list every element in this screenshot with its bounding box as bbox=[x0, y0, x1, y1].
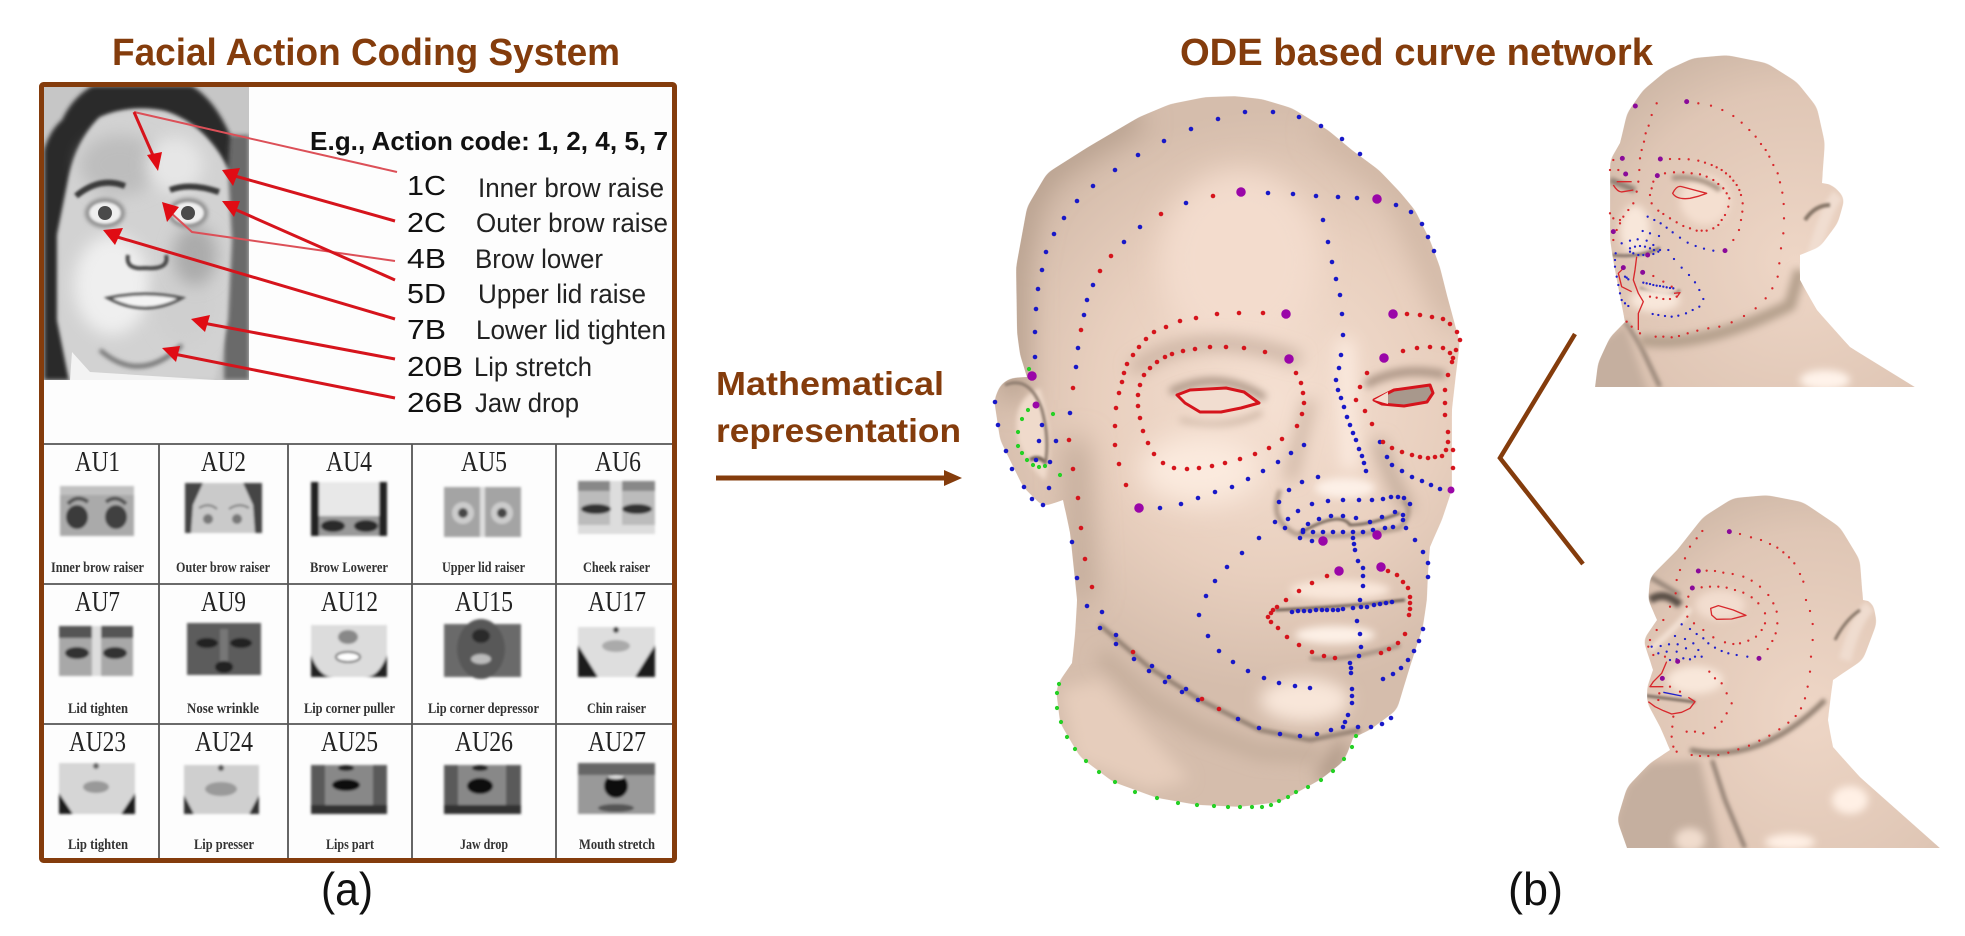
head surface bbox=[994, 96, 1460, 807]
title: Facial Action Coding System: Facial Action Coding System bbox=[112, 32, 620, 74]
red curves bbox=[1069, 196, 1460, 709]
thumbnail: AU1 bbox=[60, 486, 134, 536]
AU labels: AU23 bbox=[69, 726, 126, 758]
AU captions: Nose wrinkle bbox=[187, 701, 259, 717]
action code list: Brow lower bbox=[475, 244, 603, 274]
arrow: to curve network bbox=[716, 470, 962, 486]
connector: bracket to side views bbox=[1500, 334, 1583, 564]
AU captions: Lips part bbox=[326, 837, 374, 853]
AU captions: Inner brow raiser bbox=[51, 560, 144, 576]
AU labels: AU4 bbox=[326, 446, 372, 478]
AU captions: Outer brow raiser bbox=[176, 560, 270, 576]
thumbnail: AU24 bbox=[184, 765, 259, 814]
eye: right bbox=[1374, 385, 1433, 406]
red arrows from action codes to face bbox=[103, 112, 397, 398]
AU labels: AU1 bbox=[75, 446, 120, 478]
thumbnail: AU25 bbox=[311, 765, 387, 814]
AU labels bbox=[69, 446, 646, 758]
network dots: top side view bbox=[1610, 102, 1784, 337]
AU captions: Upper lid raiser bbox=[442, 560, 525, 576]
thumbnail: AU12 bbox=[311, 625, 387, 677]
label: Mathematical representation bbox=[716, 365, 961, 449]
label: Mathematical representation: Mathematical bbox=[716, 365, 944, 402]
action code list: 7B bbox=[407, 314, 446, 345]
action code list: Outer brow raise bbox=[476, 208, 668, 238]
thumbnail: AU27 bbox=[578, 763, 655, 814]
action code list: 2C bbox=[407, 207, 446, 238]
AU labels: AU26 bbox=[455, 726, 513, 758]
AU captions: Lip corner puller bbox=[304, 701, 395, 717]
thumbnail: AU15 bbox=[444, 619, 521, 679]
thumbnail: AU17 bbox=[578, 627, 655, 677]
action code list bbox=[407, 170, 668, 418]
AU labels: AU17 bbox=[588, 586, 646, 618]
AU labels: AU2 bbox=[201, 446, 246, 478]
action code list: Jaw drop bbox=[475, 388, 579, 418]
AU labels: AU15 bbox=[455, 586, 513, 618]
AU captions bbox=[51, 560, 656, 853]
purple control points bbox=[1032, 192, 1393, 571]
action code list: Lower lid tighten bbox=[476, 315, 666, 345]
AU captions: Jaw drop bbox=[460, 837, 508, 853]
action code list: Upper lid raise bbox=[478, 279, 646, 309]
side view head: top bbox=[1595, 55, 1915, 387]
network dots: bottom side view bbox=[1648, 531, 1813, 756]
panel: facial action coding chart bbox=[42, 84, 674, 860]
label (b): (b) bbox=[1508, 863, 1563, 915]
action code example heading: E.g., Action code: 1, 2, 4, 5, 7 bbox=[310, 126, 668, 156]
photo: fearful face bbox=[44, 86, 249, 380]
thumbnail: AU26 bbox=[444, 765, 521, 814]
AU labels: AU6 bbox=[595, 446, 641, 478]
thumbnail: AU4 bbox=[311, 482, 387, 536]
green curves bbox=[1018, 369, 1356, 807]
action unit grid bbox=[44, 444, 672, 860]
action code list: 20B bbox=[407, 351, 463, 382]
AU captions: Chin raiser bbox=[587, 701, 646, 717]
thumbnail: AU5 bbox=[444, 487, 521, 537]
AU captions: Mouth stretch bbox=[579, 837, 656, 853]
thumbnail: AU23 bbox=[59, 763, 135, 814]
title: ODE based curve network: ODE based curve network bbox=[1180, 32, 1654, 74]
thumbnail: AU6 bbox=[578, 481, 655, 534]
AU labels: AU27 bbox=[588, 726, 646, 758]
action code list: Inner brow raise bbox=[478, 173, 664, 203]
AU captions: Lip presser bbox=[194, 837, 254, 853]
AU captions: Lip corner depressor bbox=[428, 701, 539, 717]
label (a): (a) bbox=[321, 863, 373, 915]
action code list: 1C bbox=[407, 170, 446, 201]
AU labels: AU7 bbox=[75, 586, 120, 618]
AU labels: AU12 bbox=[321, 586, 378, 618]
action code list: 26B bbox=[407, 387, 463, 418]
eye: left bbox=[1177, 388, 1259, 412]
AU labels: AU25 bbox=[321, 726, 378, 758]
AU labels: AU24 bbox=[195, 726, 253, 758]
main head with curve network bbox=[980, 80, 1480, 820]
AU captions: Lid tighten bbox=[68, 701, 129, 717]
side view head: bottom bbox=[1618, 495, 1940, 848]
AU captions: Lip tighten bbox=[68, 837, 129, 853]
label: Mathematical representation: representation bbox=[716, 412, 961, 449]
thumbnail: AU9 bbox=[187, 623, 261, 675]
action code list: Lip stretch bbox=[474, 352, 592, 382]
AU labels: AU5 bbox=[461, 446, 507, 478]
thumbnail: AU2 bbox=[185, 483, 262, 533]
action code list: 4B bbox=[407, 243, 446, 274]
blue curves bbox=[995, 112, 1440, 736]
AU captions: Cheek raiser bbox=[583, 560, 650, 576]
action code list: 5D bbox=[407, 278, 446, 309]
AU labels: AU9 bbox=[201, 586, 246, 618]
AU captions: Brow Lowerer bbox=[310, 560, 388, 576]
thumbnail: AU7 bbox=[59, 626, 133, 676]
